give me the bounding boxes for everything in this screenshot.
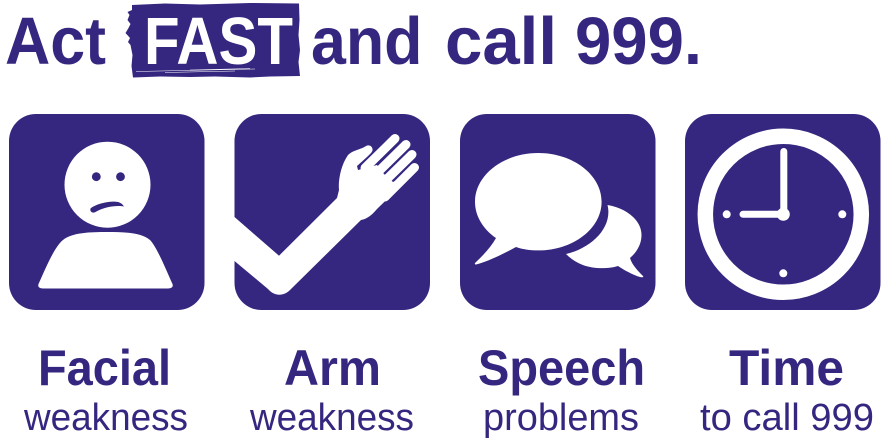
title bbox=[5, 3, 702, 79]
icon: raised arm bbox=[234, 138, 416, 295]
panel: arm weakness bbox=[234, 114, 430, 310]
panel: facial weakness bbox=[9, 114, 204, 310]
title word: FAST: FAST bbox=[144, 4, 293, 79]
label: Time to call 999 bbox=[700, 340, 874, 439]
icon: large speech bubble bbox=[475, 153, 602, 264]
label: Facial weakness bbox=[23, 340, 188, 439]
label: Arm weakness: weakness bbox=[249, 397, 414, 439]
label: Speech problems bbox=[478, 340, 645, 439]
label: Arm weakness bbox=[249, 340, 414, 439]
title words: and call 999. bbox=[311, 4, 702, 79]
label: Speech problems: problems bbox=[483, 397, 639, 439]
brush stroke highlight bbox=[126, 3, 300, 78]
label: Facial weakness: Facial bbox=[38, 340, 171, 396]
label: Speech problems: Speech bbox=[478, 340, 645, 396]
label: Facial weakness: weakness bbox=[23, 397, 188, 439]
panel: speech problems bbox=[460, 114, 656, 310]
label: Time to call 999: to call 999 bbox=[700, 397, 874, 439]
label: Time to call 999: Time bbox=[729, 340, 844, 396]
title words: and call 999.: and bbox=[311, 4, 422, 79]
title word: Act: Act bbox=[5, 4, 106, 79]
title words: and call 999.: 999. bbox=[575, 4, 702, 79]
title words: and call 999.: call bbox=[445, 4, 557, 79]
label: Arm weakness: Arm bbox=[284, 340, 381, 396]
icon: shoulders bbox=[38, 232, 173, 288]
panel: time to call 999 bbox=[685, 114, 880, 310]
icon: clock bbox=[705, 136, 861, 292]
icon: small speech bubble bbox=[566, 205, 643, 277]
icon: sad face bbox=[64, 142, 150, 228]
